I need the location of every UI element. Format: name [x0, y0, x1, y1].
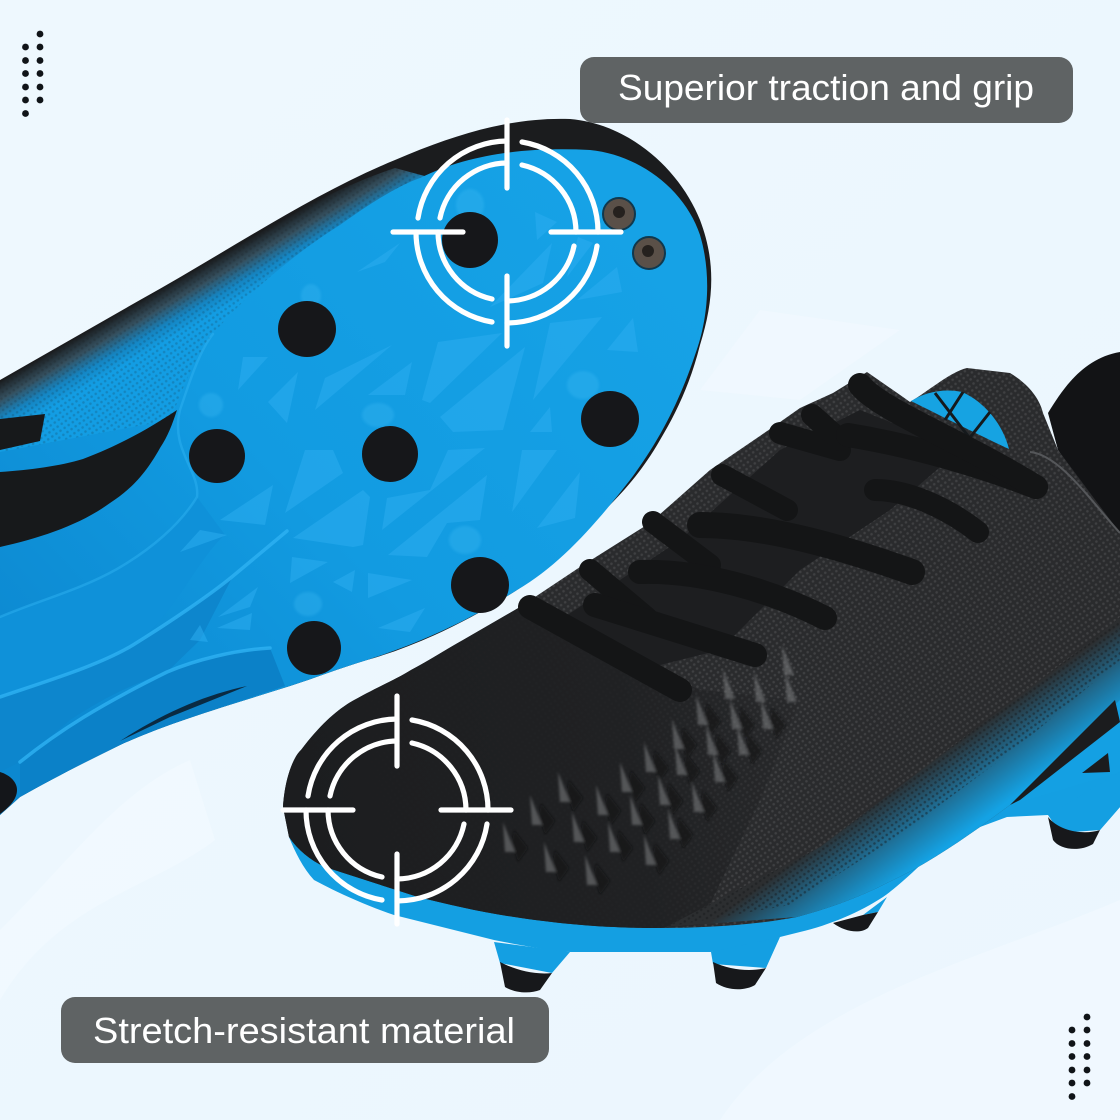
sole: moulded triangles: [180, 212, 638, 642]
sole: black studs: [189, 212, 639, 675]
shoe: collar seam: [1030, 452, 1120, 533]
shoe: blue outsole: [289, 770, 1120, 952]
shoe: rear blue panel: [1010, 700, 1120, 805]
sole: heel stud: [0, 772, 17, 814]
stud: front: [494, 942, 570, 992]
sole: left stripe: [0, 414, 45, 450]
sole: lower panels: [0, 497, 225, 697]
shoe: tongue logo: [911, 390, 1009, 449]
shoe: tongue: [560, 410, 960, 670]
sole: blue plate: [0, 149, 707, 815]
stud: mid rear: [833, 897, 887, 931]
stud: rear: [1048, 772, 1120, 849]
dots: top left: [22, 31, 43, 117]
label: superior traction: [580, 57, 1073, 123]
stud: middle: [711, 937, 780, 989]
target icon: material: [283, 696, 511, 924]
dots: bottom right: [1069, 1014, 1090, 1100]
boot sole view: [0, 119, 711, 815]
shoe: upper: [283, 368, 1120, 928]
target icon: traction: [393, 120, 621, 346]
sole: fading upper: [0, 168, 432, 560]
label: stretch-resistant: [61, 997, 549, 1063]
heel opening: [1048, 352, 1120, 540]
shoe: diamond texture: [503, 645, 797, 895]
label: superior traction: Superior traction and grip: [618, 67, 1034, 108]
sole: ridges: [0, 334, 287, 762]
boot side view: [283, 352, 1120, 992]
sole: stud highlights: [199, 189, 599, 616]
shoe: side stripes: [1010, 700, 1120, 805]
shoe: blue side fade: [666, 617, 1120, 927]
shoe: toe shading: [283, 607, 800, 928]
sole: black swoosh: [0, 410, 177, 547]
sole: dark inset: [120, 686, 247, 741]
sole: screws: [603, 198, 665, 269]
label: stretch-resistant: Stretch-resistant material: [93, 1010, 515, 1051]
sole: black rim: [0, 119, 711, 815]
laces: [530, 385, 1036, 690]
